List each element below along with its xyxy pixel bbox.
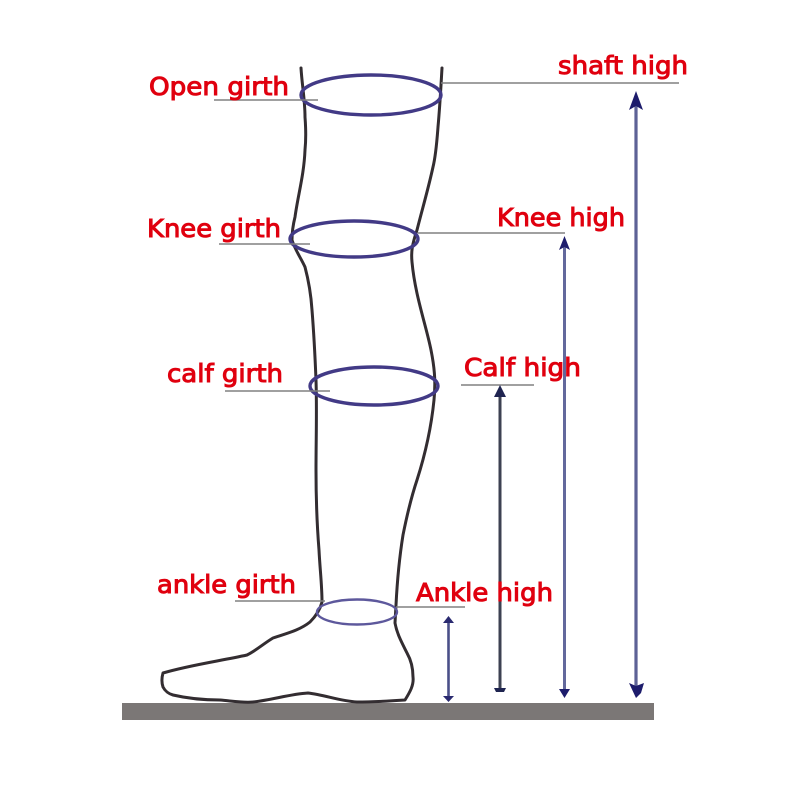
open girth ring [301, 75, 441, 115]
height arrows [443, 91, 644, 702]
label: calf high: Calf high [464, 353, 581, 382]
leader lines [214, 83, 679, 607]
calf girth ring [310, 367, 438, 405]
ground bar [122, 703, 654, 720]
leg and foot outline [162, 68, 442, 702]
calf high arrow [494, 385, 506, 692]
knee girth ring [290, 221, 418, 257]
shaft high arrow [629, 91, 644, 698]
label: ankle high: Ankle high [416, 578, 553, 607]
label: shaft high: shaft high [558, 51, 688, 80]
ankle girth ring [317, 600, 397, 624]
label: knee girth: Knee girth [147, 214, 281, 243]
label: calf girth: calf girth [167, 359, 283, 388]
ankle high arrow [443, 616, 454, 702]
label: open girth: Open girth [149, 72, 289, 101]
labels [147, 51, 688, 607]
label: knee high: Knee high [497, 203, 625, 232]
knee high arrow [559, 236, 570, 698]
girth rings [290, 75, 441, 624]
label: ankle girth: ankle girth [157, 570, 296, 599]
